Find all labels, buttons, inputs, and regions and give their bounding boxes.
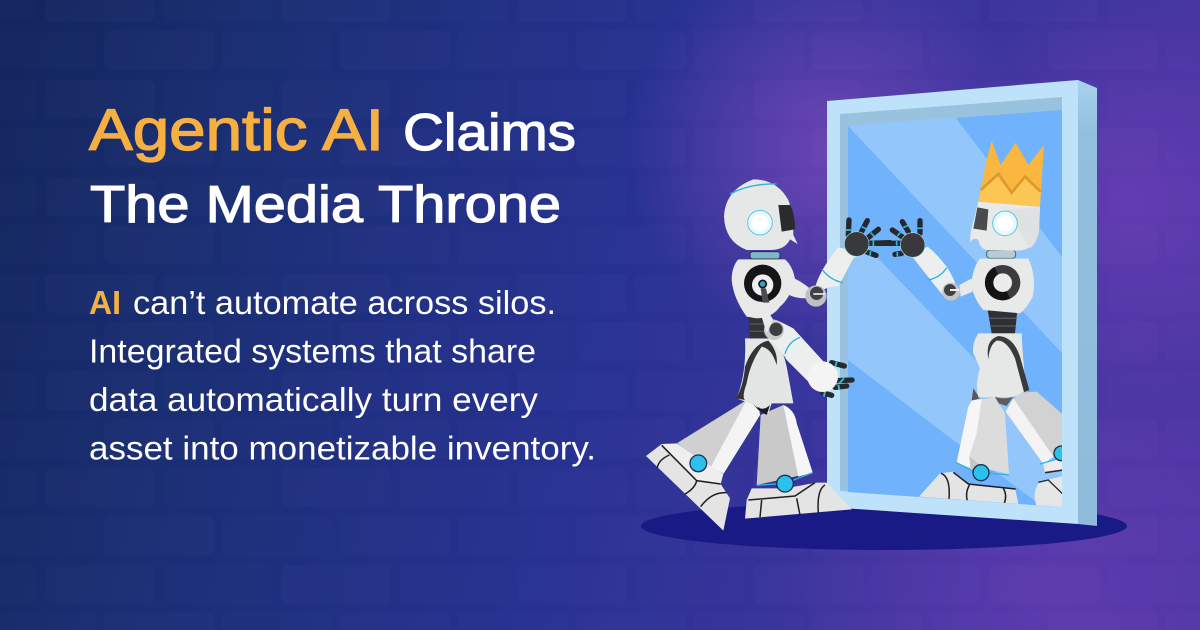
reflected rear leg <box>1006 392 1062 507</box>
reflected robot with crown <box>877 141 1069 508</box>
neck <box>750 252 780 259</box>
front leg <box>745 405 852 519</box>
reflected arm <box>912 247 973 301</box>
torso <box>732 259 795 318</box>
raised arm <box>787 247 856 307</box>
raised hand <box>844 220 890 256</box>
reflected upper body <box>877 141 1044 313</box>
body text <box>89 285 596 468</box>
mirror side <box>1078 80 1097 526</box>
title: Agentic AI <box>89 98 384 163</box>
waist <box>748 317 772 338</box>
head <box>724 179 798 250</box>
lower hand <box>807 361 852 397</box>
body text: asset into monetizable inventory. <box>89 430 596 468</box>
reflected torso <box>972 259 1034 313</box>
reflected front leg <box>919 397 1019 507</box>
title <box>89 98 576 234</box>
hip <box>736 338 793 415</box>
reflected waist <box>988 310 1017 333</box>
mirror glass <box>848 110 1062 507</box>
reflected hand <box>877 221 925 257</box>
crown <box>978 141 1044 207</box>
body text: data automatically turn every <box>89 382 538 419</box>
chest ring <box>744 265 781 303</box>
reflected lower body <box>919 310 1069 508</box>
reflected neck <box>987 250 1016 258</box>
floor shadow <box>641 502 1127 550</box>
body text: AI <box>89 285 121 322</box>
body text: Integrated systems that share <box>89 334 536 370</box>
lower arm <box>758 303 827 383</box>
rear leg <box>646 400 760 531</box>
reflected chest ring <box>985 265 1020 300</box>
body text: can’t automate across silos. <box>133 285 556 322</box>
mirror <box>827 80 1097 526</box>
walking robot <box>646 179 890 531</box>
reflected head <box>970 202 1040 251</box>
reflected hip <box>972 333 1029 406</box>
title: The Media Throne <box>90 176 561 234</box>
title: Claims <box>403 104 576 162</box>
mirror frame <box>827 80 1078 524</box>
